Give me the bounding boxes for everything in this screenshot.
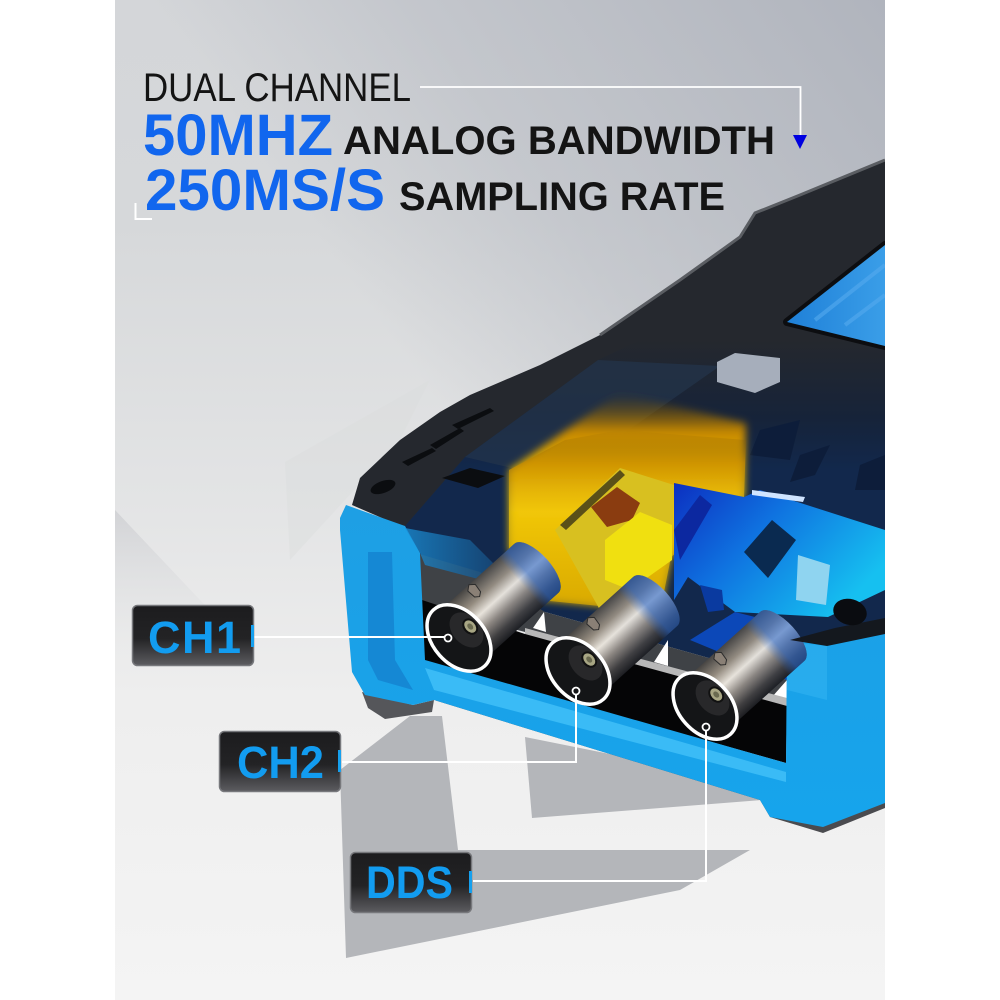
corner mark <box>136 203 152 219</box>
arrow: dual channel pointer <box>420 87 807 149</box>
dark board components <box>750 420 885 490</box>
light strip <box>525 628 787 708</box>
blue circuit board <box>674 483 885 617</box>
connector CH1 <box>425 542 561 673</box>
metric: 250MS/S: 250MS/S <box>145 158 385 223</box>
grey tile <box>717 353 780 393</box>
foot and bottom edge <box>362 692 434 719</box>
connector CH2 <box>544 575 680 706</box>
callout: CH2: CH2 <box>237 737 324 788</box>
connector DDS <box>671 610 807 741</box>
dark shell front edge <box>790 618 885 646</box>
callout: CH1 <box>132 606 452 666</box>
callout: CH1: CH1 <box>148 612 241 663</box>
label: analog bandwidth: ANALOG BANDWIDTH <box>343 119 775 163</box>
device body <box>340 160 885 833</box>
title block <box>143 66 775 223</box>
port back wall <box>416 553 787 705</box>
translucent housing window <box>405 382 885 680</box>
callout: CH2 <box>220 688 580 792</box>
blue screen <box>787 245 885 346</box>
device dark top shell <box>352 162 885 527</box>
heading: dual channel: DUAL CHANNEL <box>143 66 411 110</box>
infographic canvas <box>115 0 885 1000</box>
callout: DDS: DDS <box>366 857 453 908</box>
black port band <box>416 598 787 763</box>
translucent corner <box>406 528 493 578</box>
label: sampling rate: SAMPLING RATE <box>399 175 725 219</box>
callout: DDS <box>350 724 710 912</box>
background panel <box>115 0 885 1000</box>
floor shadow shapes <box>340 716 762 958</box>
slot vents <box>369 408 505 497</box>
blue frame <box>340 505 885 827</box>
yellow glow board <box>509 393 746 612</box>
metric: 50MHZ: 50MHZ <box>143 103 333 168</box>
